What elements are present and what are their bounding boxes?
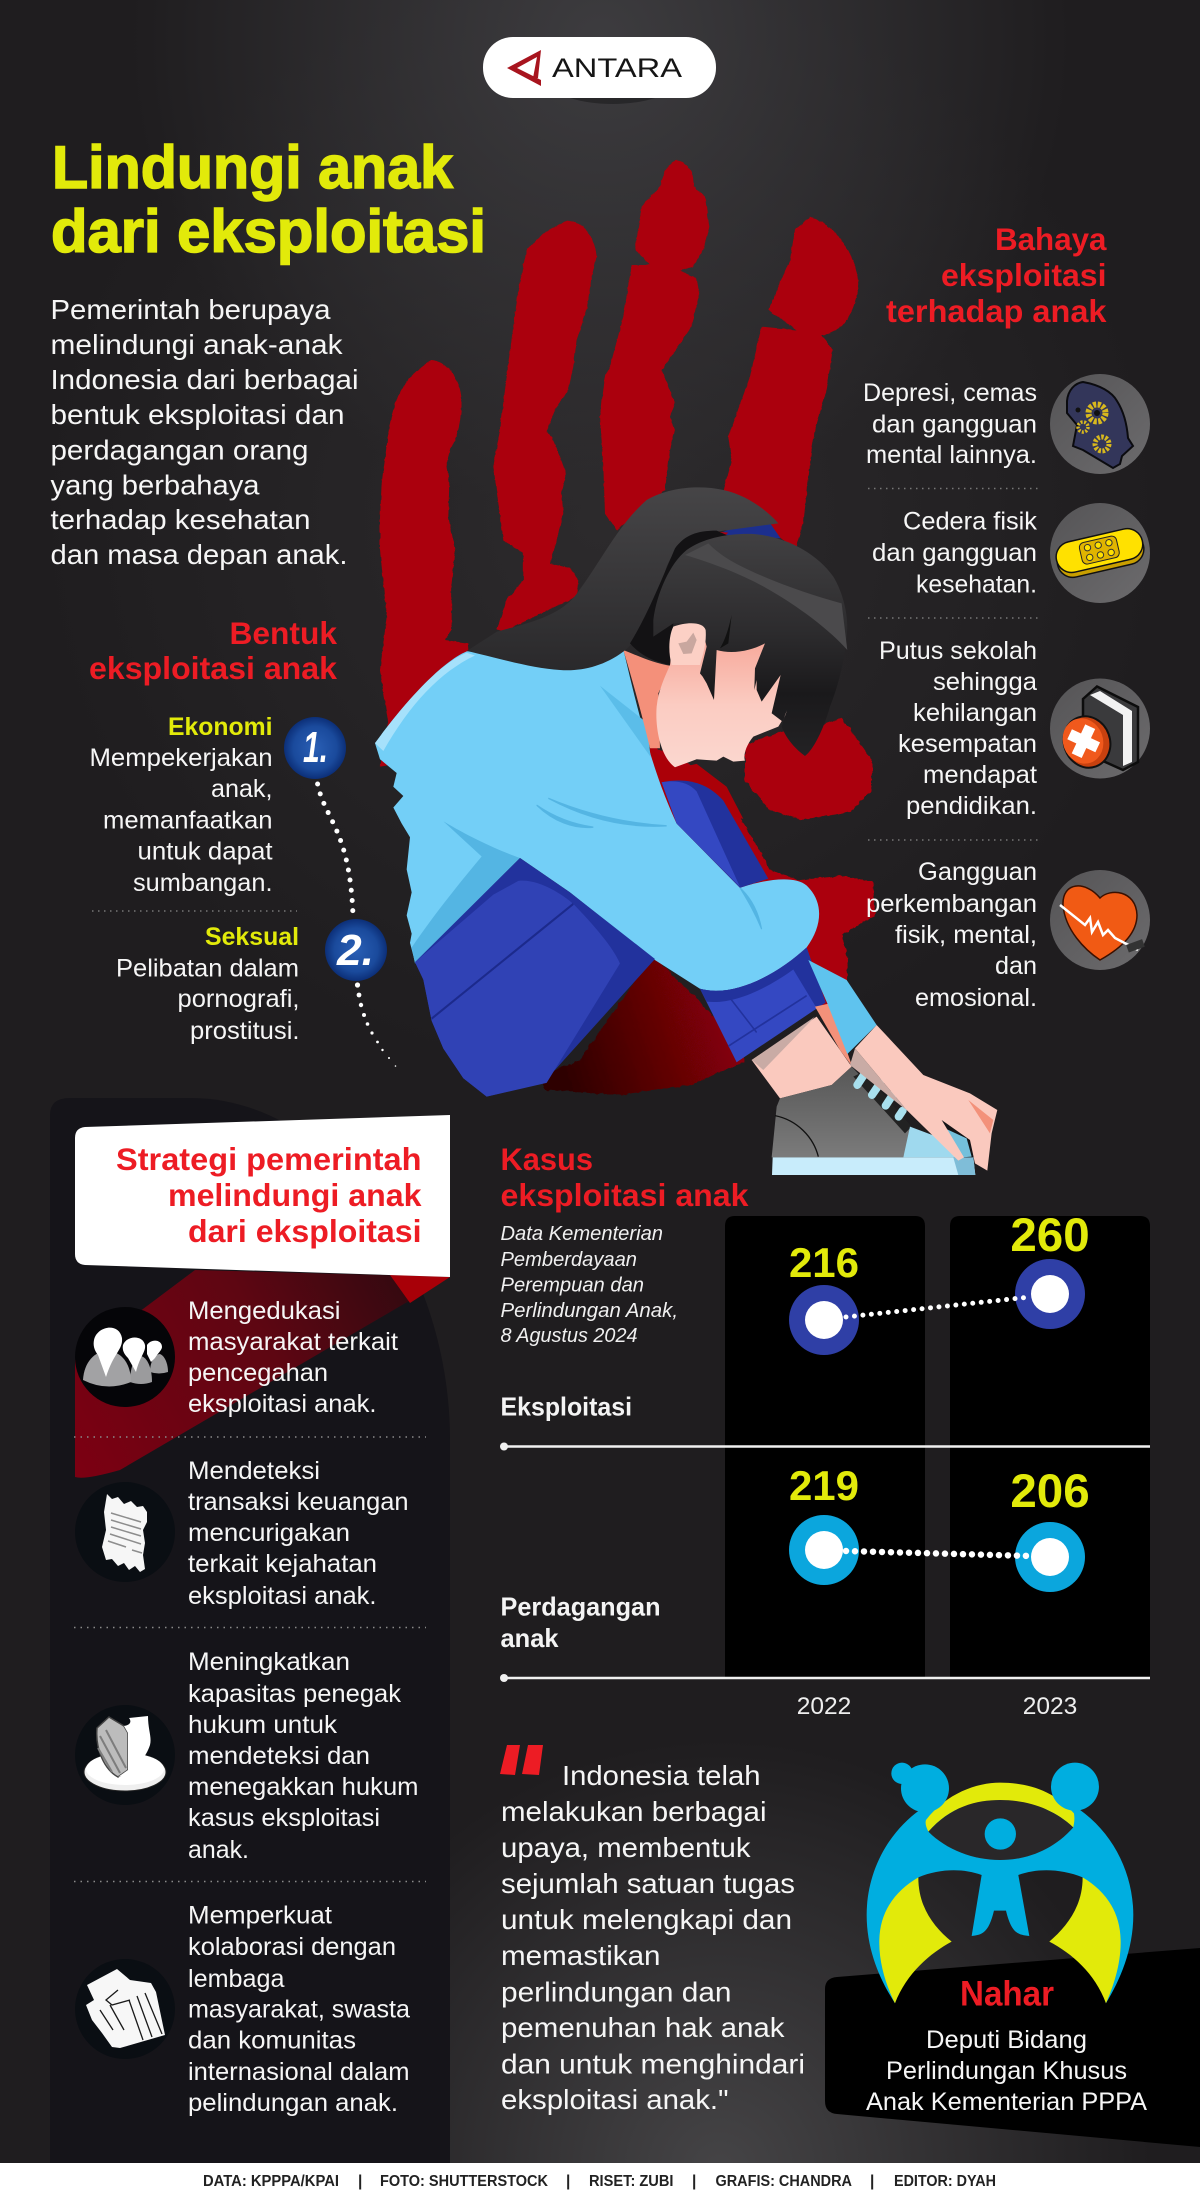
form 2: seksual: Pelibatan dalam [116, 954, 299, 982]
ear [669, 623, 706, 665]
heading: bahaya eksploitasi: Bahaya [995, 221, 1107, 257]
strategy 2: deteksi: mencurigakan [188, 1519, 350, 1547]
chart source note: 8 Agustus 2024 [500, 1324, 638, 1347]
form 2: seksual: Seksual [205, 923, 299, 951]
series: perdagangan anak [789, 1462, 1090, 1592]
paragraph intro: bentuk eksploitasi dan [50, 399, 344, 430]
row label [500, 1592, 660, 1653]
paragraph intro: melindungi anak-anak [50, 329, 344, 360]
strategy 2: deteksi: eksploitasi anak. [188, 1582, 376, 1610]
form 1: ekonomi: sumbangan. [133, 869, 272, 897]
header card: strategi: melindungi anak [168, 1177, 422, 1213]
paragraph intro: Indonesia dari berbagai [50, 364, 358, 395]
logo: kementerian PPPA [867, 1763, 1133, 2003]
form 2: seksual [92, 911, 300, 1045]
series: perdagangan anak: 219 [789, 1462, 859, 1509]
strategy 2: deteksi: transaksi keuangan [188, 1488, 408, 1516]
jacket shade [412, 821, 520, 964]
footer credits: DATA: KPPPA/KPAI [203, 2173, 339, 2190]
shoe upper [772, 1067, 912, 1157]
quote mark [500, 1745, 543, 1775]
quote text: dan untuk menghindari [501, 2048, 805, 2080]
quote text: perlindungan dan [501, 1976, 732, 2008]
handprint: red hand behind the girl [380, 160, 875, 1095]
danger 3: school: sehingga [933, 668, 1037, 696]
number badge 2: 2. [336, 926, 374, 975]
icon: heart with pulse [1050, 870, 1150, 970]
paragraph intro: terhadap kesehatan [50, 504, 310, 535]
danger 2: physical [872, 508, 1038, 598]
heading: bentuk eksploitasi anak: Bentuk [230, 615, 337, 651]
leg [752, 1017, 852, 1098]
quote text: memastikan [501, 1940, 660, 1971]
hand gap [942, 1122, 973, 1157]
row label: anak [500, 1623, 559, 1653]
strategy 4: kolaborasi: Memperkuat [188, 1902, 332, 1930]
danger 1: mental: mental lainnya. [866, 441, 1037, 469]
strategy 1: edukasi [188, 1297, 398, 1418]
head and hair [467, 487, 847, 767]
chart source note [500, 1222, 678, 1347]
footer credits: | [870, 2173, 874, 2190]
chart heading [500, 1141, 749, 1213]
logo: ANTARA [483, 37, 716, 104]
main hair [653, 534, 847, 756]
danger 4: development: dan [995, 952, 1037, 980]
paragraph intro: perdagangan orang [50, 434, 308, 466]
far leg [662, 781, 768, 888]
laces [857, 1073, 903, 1117]
number badge 2 [325, 919, 387, 981]
quote text: eksploitasi anak." [501, 2084, 728, 2115]
header card: strategi: Strategi pemerintah [116, 1141, 422, 1177]
danger 3: school [879, 637, 1037, 820]
quote text: sejumlah satuan tugas [501, 1868, 795, 1899]
shorts cuff [700, 947, 826, 1062]
icon: handshake [75, 1959, 175, 2059]
chart heading: eksploitasi anak [500, 1177, 749, 1213]
danger 3: school: mendapat [923, 761, 1037, 789]
hand [855, 1025, 997, 1171]
strategy 4: kolaborasi: masyarakat, swasta [188, 1996, 410, 2024]
form 1: ekonomi: Ekonomi [168, 713, 272, 741]
danger 3: school: kehilangan [913, 699, 1037, 727]
footer credits: FOTO: SHUTTERSTOCK [380, 2173, 549, 2190]
strategy 3: penegakan hukum: anak. [188, 1836, 249, 1864]
dark under hair [630, 531, 727, 665]
axis years: 2022 [797, 1693, 851, 1720]
danger 3: school: kesempatan [898, 730, 1037, 758]
danger 1: mental: Depresi, cemas [863, 379, 1037, 407]
heading: bahaya eksploitasi [886, 221, 1107, 329]
strategy 2: deteksi: Mendeteksi [188, 1457, 320, 1485]
quote text: Indonesia telah [562, 1760, 760, 1791]
sole [772, 1157, 975, 1175]
title [51, 134, 486, 265]
form 1: ekonomi: Mempekerjakan [90, 744, 272, 772]
danger 1: mental [863, 379, 1037, 469]
speaker name and title: Deputi Bidang [926, 2026, 1087, 2054]
speaker name and title [866, 1974, 1147, 2116]
header card: strategi [75, 1115, 450, 1277]
danger 3: school: pendidikan. [906, 792, 1037, 820]
danger 3: school: Putus sekolah [879, 637, 1037, 665]
logo: ANTARA: ANTARA [552, 53, 682, 83]
danger 2: physical: Cedera fisik [903, 508, 1038, 536]
icon: group of people [75, 1307, 175, 1407]
strategy 1: edukasi: Mengedukasi [188, 1297, 340, 1325]
strategy 4: kolaborasi: internasional dalam [188, 2058, 410, 2086]
strategy 2: deteksi: terkait kejahatan [188, 1550, 377, 1578]
chart source note: Pemberdayaan [500, 1248, 637, 1271]
heading: bahaya eksploitasi: terhadap anak [886, 293, 1107, 329]
strategy 4: kolaborasi [188, 1902, 410, 2117]
neck [623, 650, 672, 748]
axis years [797, 1693, 1077, 1720]
hair highlight [685, 543, 847, 650]
footer credits: EDITOR: DYAH [894, 2173, 996, 2190]
strategy 3: penegakan hukum: kapasitas penegak [188, 1680, 402, 1708]
chart source note: Perlindungan Anak, [500, 1299, 678, 1322]
danger 4: development: perkembangan [866, 890, 1037, 918]
strategy 3: penegakan hukum: mendeteksi dan [188, 1742, 370, 1770]
series: eksploitasi: 216 [789, 1239, 859, 1286]
chart source note: Data Kementerian [500, 1222, 663, 1245]
dotted connector between numbers [318, 784, 396, 1067]
strategy 1: edukasi: masyarakat terkait [188, 1328, 398, 1356]
strategy 4: kolaborasi: pelindungan anak. [188, 2089, 398, 2117]
chart source note: Perempuan dan [500, 1274, 644, 1296]
strategy 3: penegakan hukum [188, 1648, 418, 1864]
wrinkles [537, 798, 762, 929]
icon: bandage [1050, 503, 1150, 603]
quote text: melakukan berbagai [501, 1796, 766, 1827]
red triangle behind header [75, 1270, 450, 1478]
form 1: ekonomi: untuk dapat [138, 838, 273, 866]
series: perdagangan anak: 206 [1010, 1465, 1090, 1518]
toe [903, 1127, 973, 1157]
strategy 4: kolaborasi: dan komunitas [188, 2026, 356, 2054]
header card: strategi: dari eksploitasi [188, 1213, 422, 1249]
row label: Perdagangan [500, 1592, 660, 1622]
footer credits: | [692, 2173, 696, 2190]
icon: book and medical cross [1050, 678, 1150, 778]
footer credits: RISET: ZUBI [589, 2173, 674, 2190]
strategy 2: deteksi [188, 1457, 408, 1610]
paragraph intro: dan masa depan anak. [50, 539, 348, 570]
form 1: ekonomi: memanfaatkan [103, 806, 272, 834]
heading: bahaya eksploitasi: eksploitasi [941, 257, 1106, 293]
row label: Eksploitasi [500, 1392, 632, 1422]
danger 4: development: emosional. [915, 984, 1037, 1012]
paragraph intro [50, 294, 358, 570]
quote text [501, 1760, 805, 2115]
title: Lindungi anak [52, 134, 454, 201]
icon: head with gears [1050, 374, 1150, 474]
chart heading: Kasus [500, 1141, 593, 1177]
jacket [375, 640, 819, 991]
girl illustration [375, 487, 997, 1175]
strategy 1: edukasi: eksploitasi anak. [188, 1390, 376, 1418]
danger 2: physical: dan gangguan [872, 539, 1037, 567]
number badge 1: 1. [303, 723, 328, 772]
strategy 3: penegakan hukum: Meningkatkan [188, 1648, 350, 1676]
speaker card background [825, 1948, 1200, 2147]
quote text: untuk melengkapi dan [501, 1904, 792, 1935]
speaker name and title: Perlindungan Khusus [886, 2057, 1127, 2085]
panel: strategi pemerintah [50, 1098, 450, 2163]
danger 4: development: fisik, mental, [895, 921, 1037, 949]
icon: shield on plate [75, 1705, 175, 1805]
quote text: pemenuhan hak anak [501, 2012, 786, 2043]
number badge 1 [284, 717, 346, 779]
quote text: upaya, membentuk [501, 1832, 752, 1863]
form 1: ekonomi: anak, [211, 775, 272, 803]
footer credits: GRAFIS: CHANDRA [716, 2173, 852, 2190]
ponytail hair [467, 487, 778, 670]
speaker name and title: Anak Kementerian PPPA [866, 2088, 1147, 2116]
hair tie [720, 521, 781, 538]
title: dari eksploitasi [51, 198, 486, 265]
strategy 4: kolaborasi: kolaborasi dengan [188, 1933, 396, 1961]
heading: bentuk eksploitasi anak [89, 615, 337, 686]
pants leg [415, 858, 655, 1097]
form 1: ekonomi [90, 713, 273, 897]
chart: kasus per tahun [500, 1209, 1150, 1720]
series: eksploitasi: 260 [1010, 1209, 1090, 1262]
footer credits: | [566, 2173, 570, 2190]
heading: bentuk eksploitasi anak: eksploitasi anak [89, 650, 337, 686]
footer credits: | [358, 2173, 362, 2190]
paragraph intro: Pemerintah berupaya [50, 294, 331, 325]
face [656, 630, 787, 767]
axis years: 2023 [1023, 1693, 1077, 1720]
speaker name and title: Nahar [960, 1974, 1054, 2014]
series: eksploitasi [789, 1209, 1090, 1355]
danger 4: development: Gangguan [918, 858, 1037, 886]
danger 1: mental: dan gangguan [872, 410, 1037, 438]
form 2: seksual: prostitusi. [190, 1017, 300, 1045]
jacket highlight [375, 653, 475, 751]
strategy 4: kolaborasi: lembaga [188, 1965, 285, 1993]
footer credits [0, 2163, 1200, 2200]
strategy 3: penegakan hukum: kasus eksploitasi [188, 1804, 380, 1832]
danger 4: development [866, 858, 1037, 1012]
form 2: seksual: pornografi, [178, 985, 300, 1013]
strategy 1: edukasi: pencegahan [188, 1359, 328, 1387]
icon: receipt [75, 1482, 175, 1582]
strategy 3: penegakan hukum: hukum untuk [188, 1711, 338, 1739]
danger 2: physical: kesehatan. [916, 570, 1037, 598]
body and clothing [375, 640, 826, 1097]
collar shade [600, 686, 651, 757]
paragraph intro: yang berbahaya [50, 470, 260, 500]
sleeve [808, 960, 877, 1054]
strategy 3: penegakan hukum: menegakkan hukum [188, 1773, 418, 1801]
